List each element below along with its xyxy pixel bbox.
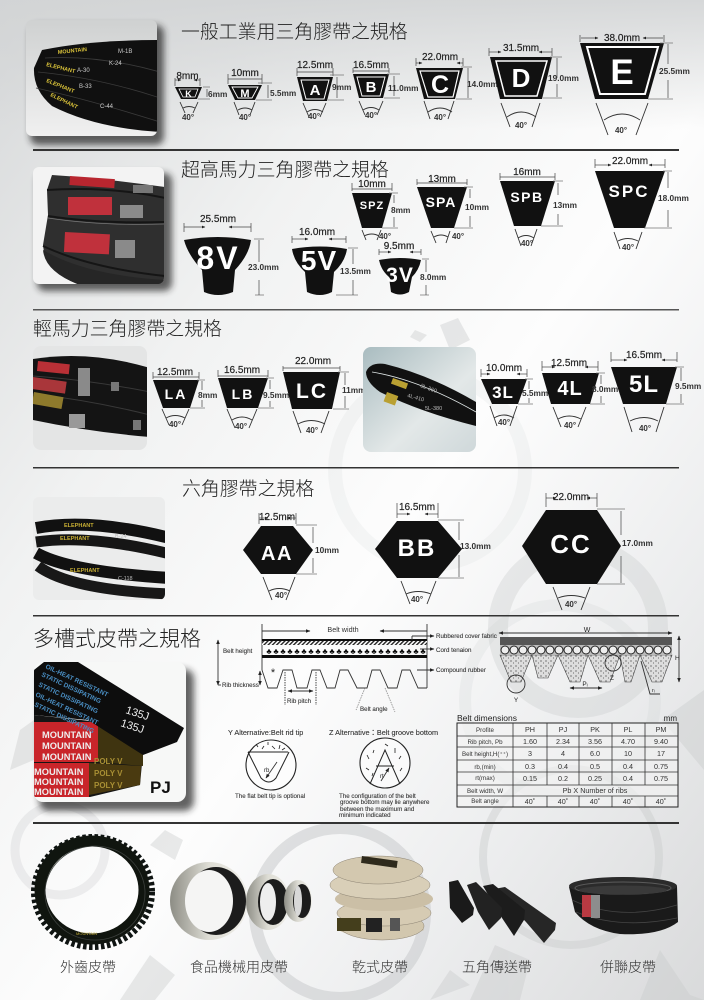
diagram: belt section: Compound rubber (436, 667, 486, 674)
photo: 3L 4L 5L belts: 3L-360 (419, 383, 437, 395)
belt A: A (310, 82, 321, 99)
photo: general belts: ELEPHANT (49, 92, 79, 111)
diagram: belt section: ♣ (287, 647, 293, 656)
belt 5V: 13.5mm (340, 266, 371, 276)
table: belt dimensions: 2.34 (556, 737, 570, 746)
diagram: belt section: Rubbered cover fabric (436, 633, 497, 640)
belt 8V: 8V (196, 240, 240, 276)
heading: hexagonal belts: 六角膠帶之規格 (182, 478, 314, 500)
belt BB: BB (398, 535, 436, 562)
diagram: rib cross-section: Z (610, 675, 614, 682)
panel: other belt products (34, 837, 678, 975)
table: belt dimensions (457, 713, 678, 807)
table: belt dimensions: mm (664, 714, 677, 723)
table: belt dimensions: Belt width, W (467, 788, 503, 795)
photo: general belts: ELEPHANT (46, 62, 76, 75)
belt 4L: 40° (564, 421, 576, 430)
diagram: belt section: Cord tenaion (436, 647, 472, 654)
panel: light-duty V-belts (31, 318, 701, 452)
photo: PJ belt: OIL-HEAT RESISTANT (34, 691, 99, 727)
diagram: belt section: Belt height (223, 648, 253, 655)
diagram: belt section: ♣ (413, 647, 419, 656)
diagram: alternative Z: minimum indicated (339, 812, 391, 819)
belt 3V: 9.5mm (384, 241, 414, 252)
diagram: belt section: ♣ (315, 647, 321, 656)
diagram: belt section: Rib pitch (287, 698, 312, 705)
label: pentagonal belts: 五角傳送帶 (462, 959, 532, 975)
belt M: 10mm (231, 68, 259, 79)
belt LB: LB (232, 386, 254, 402)
table: belt dimensions: 40˚ (623, 797, 633, 806)
belt SPB (500, 167, 577, 248)
belt 3L: 3L (492, 383, 514, 402)
diagram: alternative Z: groove bottom may lie anywhere (340, 799, 430, 806)
belt 5L: 9.5mm (675, 381, 701, 391)
diagram: rib cross-section: rᵢ (652, 688, 655, 694)
photo: hexagonal belts (33, 497, 170, 600)
belt 4L: 12.5mm (551, 358, 587, 369)
table: belt dimensions: 6.0 (590, 749, 600, 758)
divider 1 (33, 149, 679, 151)
belt 3V: 3V (386, 264, 414, 287)
belt SPC: SPC (609, 182, 649, 201)
belt CC: CC (550, 529, 592, 559)
table: belt dimensions: 3 (528, 749, 532, 758)
table: belt dimensions: 0.75 (654, 774, 668, 783)
diagram: belt section: ♣ (371, 647, 377, 656)
belt AA: 40° (275, 591, 287, 600)
table: belt dimensions: 17 (657, 749, 665, 758)
belt LA: 40° (169, 420, 181, 429)
photo: general belts: A-30 (77, 68, 90, 74)
table: belt dimensions: 40˚ (558, 797, 568, 806)
diagram: belt section: ♣ (280, 647, 286, 656)
belt D: 31.5mm (503, 43, 539, 54)
photo: PJ belt (33, 662, 194, 811)
belt SPB: 13mm (553, 200, 577, 210)
belt 3L: 40° (498, 418, 510, 427)
table: belt dimensions: 9.40 (654, 737, 668, 746)
belt B: B (366, 79, 377, 96)
diagram: belt section: ♣ (322, 647, 328, 656)
photo: PJ belt: OIL-HEAT RESISTANT (44, 663, 109, 699)
belt 5L: 5L (629, 371, 659, 398)
diagram: belt section: ♣ (392, 647, 398, 656)
product: joined belts (569, 877, 678, 975)
belt BB: 16.5mm (399, 502, 435, 513)
diagram: alternative Y: The flat belt tip is optional (235, 793, 305, 800)
panel: high-horsepower V-belts (33, 156, 689, 295)
product: toothed belt (34, 837, 152, 975)
diagram: belt section: ♣ (301, 647, 307, 656)
belt 3L (481, 363, 548, 427)
table: belt dimensions: 3.56 (588, 737, 602, 746)
belt B: 16.5mm (353, 60, 389, 71)
divider 2 (33, 309, 679, 310)
belt 3L: 5.5mm (522, 388, 548, 398)
diagram: alternative Z: The configuration of the belt (339, 793, 416, 800)
belt LC: 40° (306, 426, 318, 435)
belt E: 38.0mm (604, 33, 640, 44)
belt AA: AA (261, 543, 293, 565)
diagram: belt section: ♣ (273, 647, 279, 656)
belt LC: 11mm (342, 385, 366, 395)
belt LC (283, 356, 366, 435)
table: belt dimensions: PK (590, 725, 600, 734)
belt 3V (379, 241, 446, 295)
belt SPC: 40° (622, 243, 634, 252)
belt E (580, 33, 690, 135)
product: toothed belt: MOUNTAIN (76, 931, 97, 936)
photo: PJ belt: MOUNTAIN (42, 730, 92, 740)
belt 5V: 16.0mm (299, 227, 335, 238)
photo: general belts: K-24 (109, 61, 122, 67)
belt A: 40° (308, 112, 320, 121)
table: belt dimensions: 0.25 (588, 774, 602, 783)
table: belt dimensions: 40˚ (590, 797, 600, 806)
table: belt dimensions: 4 (561, 749, 565, 758)
belt 5V: 5V (301, 245, 337, 276)
photo: PJ belt: PJ (150, 778, 171, 797)
label: toothed belt: 外齒皮帶 (60, 959, 116, 975)
belt SPZ: 40° (379, 232, 391, 241)
diagram: alternative Y (228, 728, 305, 800)
belt M: M (240, 88, 250, 100)
belt 8V: 23.0mm (248, 262, 279, 272)
divider 5 (33, 822, 679, 824)
diagram: rib cross-section: H (675, 655, 680, 662)
diagram: belt section: ♣ (364, 647, 370, 656)
belt A: 12.5mm (297, 60, 333, 71)
photo: PJ belt: POLY V (94, 757, 123, 766)
diagram: rib cross-section: Pᵢ (582, 681, 588, 688)
photo: high-horsepower belts (33, 167, 172, 291)
photo: general belts: ELEPHANT (45, 78, 76, 95)
belt AA (243, 512, 339, 600)
diagram: rib cross-section: Y (514, 697, 519, 704)
belt LA (153, 367, 217, 429)
photo: 3L 4L 5L belts: 5L-380 (425, 406, 442, 412)
belt SPZ: SPZ (360, 200, 384, 212)
belt SPZ (352, 179, 410, 241)
photo: general belts: M-1B (118, 49, 132, 55)
belt BB (375, 502, 491, 604)
belt SPB: SPB (510, 189, 544, 205)
table: belt dimensions: Rib pitch, Pb (467, 739, 503, 746)
panel: general industrial V-belts (26, 20, 690, 145)
photo: general belts: C-44 (100, 104, 114, 110)
belt LC: 22.0mm (295, 356, 331, 367)
table: belt dimensions: 0.75 (654, 762, 668, 771)
diagram: belt section: ♣ (266, 647, 272, 656)
belt 5L: 40° (639, 424, 651, 433)
belt SPA: 13mm (428, 174, 456, 185)
label: joined belts: 併聯皮帶 (600, 959, 656, 975)
table: belt dimensions: Belt angle (471, 798, 499, 805)
belt CC (522, 492, 653, 610)
belt C (416, 52, 498, 122)
belt SPA (417, 174, 489, 243)
label: food machinery belts: 食品機械用皮帶 (190, 959, 288, 975)
belt K: 40° (182, 113, 194, 122)
belt LA: LA (165, 386, 187, 402)
table: belt dimensions: 40˚ (656, 797, 666, 806)
belt 5V (292, 227, 371, 295)
belt LB: 16.5mm (224, 365, 260, 376)
belt LB: 9.5mm (263, 390, 289, 400)
belt SPC: 18.0mm (658, 193, 689, 203)
belt SPZ: 10mm (358, 179, 386, 190)
belt LA: 12.5mm (157, 367, 193, 378)
belt 3L: 10.0mm (486, 363, 522, 374)
table: belt dimensions: rt(max) (475, 775, 495, 782)
table: belt dimensions: 0.3 (525, 762, 535, 771)
diagram: belt section: Belt width (327, 625, 359, 634)
product: food machinery belts (170, 862, 312, 975)
table: belt dimensions: 0.4 (623, 774, 633, 783)
photo: 3L 4L 5L belts: 4L-410 (406, 393, 425, 403)
belt 5L: 16.5mm (626, 350, 662, 361)
diagram: belt section: ♣ (420, 647, 426, 656)
belt LC: LC (296, 380, 328, 403)
table: belt dimensions: Belt dimensions (457, 713, 517, 723)
belt C: 14.0mm (467, 79, 498, 89)
photo: PJ belt: MOUNTAIN (34, 787, 84, 797)
diagram: belt section: Belt angle (360, 706, 388, 713)
belt C: 40° (434, 113, 446, 122)
table: belt dimensions: 40˚ (525, 797, 535, 806)
diagram: belt section: ♣ (350, 647, 356, 656)
heading: high-horsepower belts: 超高馬力三角膠帶之規格 (181, 159, 389, 181)
heading: light-duty belts: 輕馬力三角膠帶之規格 (33, 318, 222, 340)
belt K: 8mm (176, 71, 199, 82)
diagram: belt section: * (271, 667, 276, 679)
diagram: belt section: ♣ (399, 647, 405, 656)
diagram: alternative Y: Y Alternative:Belt rid tip (228, 728, 303, 737)
belt 8V (184, 214, 279, 295)
belt D: 40° (515, 121, 527, 130)
panel: hexagonal belts (33, 478, 653, 610)
table: belt dimensions: Profite (476, 727, 494, 734)
table: belt dimensions: PL (624, 725, 632, 734)
belt 5L (611, 350, 701, 433)
belt B: 11.0mm (388, 83, 418, 93)
table: belt dimensions: 10 (624, 749, 632, 758)
belt D: D (512, 63, 530, 93)
divider 3 (33, 467, 679, 468)
photo: LA LB LC belts (31, 346, 150, 450)
table: belt dimensions: rb,(min) (474, 764, 496, 771)
photo: PJ belt: 135J (124, 704, 150, 723)
diagram: belt section: ♣ (336, 647, 342, 656)
diagram: alternative Z (329, 728, 438, 819)
label: dry belts: 乾式皮帶 (352, 959, 408, 975)
photo: PJ belt: POLY V (94, 769, 123, 778)
belt SPB: 40° (521, 239, 533, 248)
diagram: rib cross-section (499, 627, 680, 704)
table: belt dimensions: 0.5 (590, 762, 600, 771)
table: belt dimensions: 0.4 (623, 762, 633, 771)
photo: PJ belt: STATIC DISSIPATING (40, 671, 102, 705)
table: belt dimensions: PM (656, 725, 666, 734)
belt C: C (431, 71, 449, 99)
heading: general belts: 一般工業用三角膠帶之規格 (181, 21, 408, 43)
belt CC: 17.0mm (622, 538, 653, 548)
diagram: belt section: ♣ (308, 647, 314, 656)
photo: hexagonal belts: C-118 (118, 576, 133, 582)
belt 3V: 8.0mm (420, 272, 446, 282)
belt SPC (595, 156, 689, 252)
photo: PJ belt: STATIC DISSIPATING (33, 701, 95, 735)
belt 8V: 25.5mm (200, 214, 236, 225)
belt LB (218, 365, 289, 431)
photo: PJ belt: MOUNTAIN (42, 741, 92, 751)
belt M (228, 68, 296, 122)
belt K (175, 71, 227, 122)
diagram: belt section: ♣ (343, 647, 349, 656)
table: belt dimensions: 0.15 (523, 774, 537, 783)
belt M: 40° (239, 113, 251, 122)
belt E: 25.5mm (659, 66, 690, 76)
belt A: 9mm (332, 82, 351, 92)
belt 4L: 8.0mm (592, 384, 618, 394)
photo: general belts: MOUNTAIN (58, 47, 87, 56)
diagram: belt section: ♣ (329, 647, 335, 656)
table: belt dimensions: 4.70 (621, 737, 635, 746)
belt SPC: 22.0mm (612, 156, 648, 167)
diagram: alternative Z: rt (380, 774, 384, 780)
belt SPA: SPA (426, 194, 456, 210)
photo: PJ belt: MOUNTAIN (42, 752, 92, 762)
belt SPA: 10mm (465, 202, 489, 212)
diagram: belt section: ♣ (385, 647, 391, 656)
photo: PJ belt: MOUNTAIN (34, 777, 84, 787)
belt C: 22.0mm (422, 52, 458, 63)
photo: hexagonal belts: ELEPHANT (60, 536, 90, 542)
photo: hexagonal belts: ELEPHANT (70, 568, 100, 574)
photo: general belts (26, 20, 164, 145)
belt LB: 40° (235, 422, 247, 431)
diagram: belt section: ♣ (406, 647, 412, 656)
belt 4L: 4L (557, 378, 583, 400)
belt SPZ: 8mm (391, 205, 410, 215)
belt D: 19.0mm (548, 73, 579, 83)
photo: PJ belt: POLY V (94, 781, 123, 790)
belt CC: 22.0mm (553, 492, 589, 503)
table: belt dimensions: Pb X Number of ribs (563, 786, 628, 795)
belt B (353, 60, 418, 120)
product: pentagonal belts (449, 880, 556, 975)
belt BB: 13.0mm (460, 541, 491, 551)
divider 4 (33, 615, 679, 616)
belt AA: 10mm (315, 545, 339, 555)
table: belt dimensions: PJ (559, 725, 568, 734)
diagram: rib cross-section: W (584, 627, 591, 634)
heading: multi-rib belts: 多槽式皮帶之規格 (33, 628, 201, 651)
diagram: belt section: ♣ (357, 647, 363, 656)
belt K: 6mm (208, 89, 227, 99)
photo: general belts: B-33 (79, 84, 92, 90)
belt D (489, 43, 579, 130)
belt K: K (185, 89, 192, 99)
photo: hexagonal belts: B-24 (115, 534, 127, 540)
belt LA: 8mm (198, 390, 217, 400)
belt E: 40° (615, 126, 627, 135)
belt A (297, 60, 351, 121)
diagram: belt section: ♣ (378, 647, 384, 656)
table: belt dimensions: 0.2 (558, 774, 568, 783)
photo: PJ belt: MOUNTAIN (34, 767, 84, 777)
diagram: belt section: Rib thickness (222, 682, 259, 689)
diagram: alternative Z: between the maximum and (340, 806, 415, 813)
diagram: alternative Z: Z Alternative：Belt groove bottom (329, 728, 438, 737)
table: belt dimensions: 1.60 (523, 737, 537, 746)
belt AA: 12.5mm (259, 512, 295, 523)
panel: multi-rib belts (33, 624, 680, 819)
belt M: 5.5mm (270, 88, 296, 98)
belt SPA: 40° (452, 232, 464, 241)
table: belt dimensions: Belt height,H(⁺⁺) (462, 751, 508, 758)
diagram: belt section: ♣ (294, 647, 300, 656)
product: dry belts (330, 856, 433, 975)
table: belt dimensions: PH (525, 725, 535, 734)
belt SPB: 16mm (513, 167, 541, 178)
belt CC: 40° (565, 600, 577, 609)
photo: 3L 4L 5L belts (363, 347, 476, 452)
table: belt dimensions: 0.4 (558, 762, 568, 771)
belt 4L (542, 358, 618, 430)
photo: PJ belt: STATIC DISSIPATING (37, 681, 99, 715)
belt E: E (610, 53, 634, 92)
belt BB: 40° (411, 595, 423, 604)
belt B: 40° (365, 111, 377, 120)
diagram: belt section (218, 624, 497, 713)
photo: PJ belt: 135J (119, 717, 145, 736)
diagram: alternative Y: rb (264, 768, 270, 774)
photo: hexagonal belts: ELEPHANT (64, 523, 94, 529)
